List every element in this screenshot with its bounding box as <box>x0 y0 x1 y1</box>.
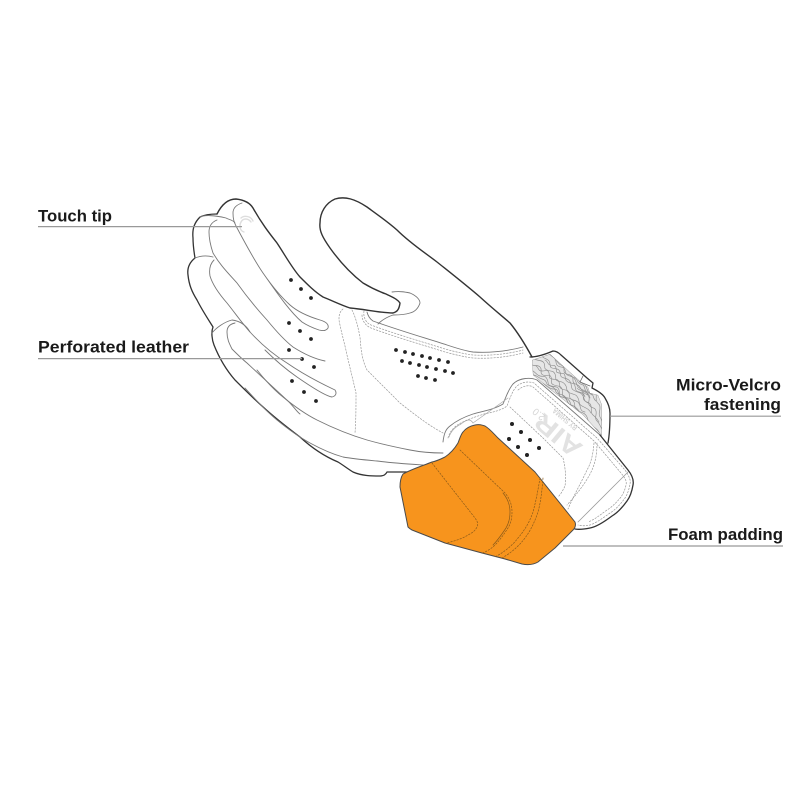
orange foam padding <box>400 425 575 565</box>
finger inner lines <box>195 203 523 465</box>
callout: micro-velcro fastening <box>610 376 781 416</box>
glove illustration <box>188 198 633 565</box>
strap logo: BY SHIMA <box>550 406 579 432</box>
strap logo: 2.0 <box>531 405 548 422</box>
stitching <box>339 309 523 433</box>
micro-velcro textured panel <box>530 352 602 436</box>
fingers outer edge <box>188 214 410 476</box>
finger perforations <box>287 278 318 403</box>
callout: perforated leather: Perforated leather <box>38 338 190 356</box>
touch tip <box>240 216 253 232</box>
velcro tab <box>530 351 610 443</box>
main glove outline <box>217 198 532 357</box>
callout: micro-velcro fastening: Micro-Velcro <box>676 376 781 394</box>
palm perforations <box>394 348 455 382</box>
wrist strap <box>443 378 633 529</box>
strap logo: AIR <box>529 407 588 463</box>
strap stitching <box>448 382 630 526</box>
callout: micro-velcro fastening: fastening <box>704 396 781 414</box>
strap perforations <box>507 422 541 457</box>
callout: touch tip: Touch tip <box>38 208 112 226</box>
callout: foam padding: Foam padding <box>668 526 783 544</box>
